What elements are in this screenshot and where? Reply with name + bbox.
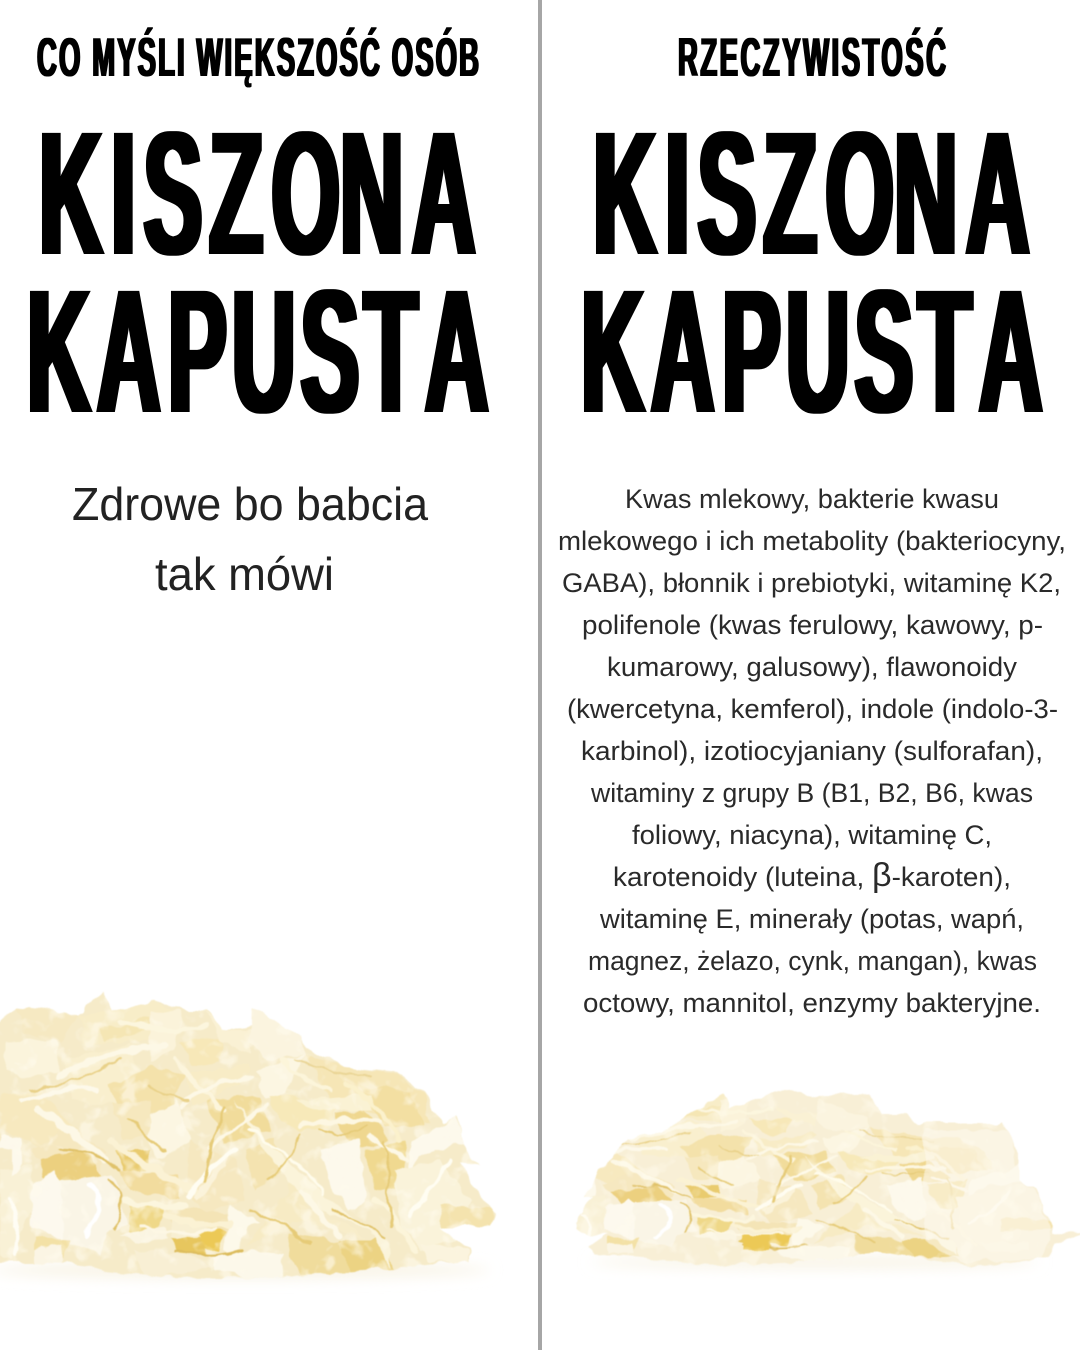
text: list of actual compounds: kumarowy, galusowy), flawonoidy	[607, 652, 1018, 682]
divider between columns	[538, 0, 542, 1350]
text: popular belief statement: Zdrowe bo babcia	[72, 478, 428, 530]
text: popular belief statement: tak mówi	[155, 548, 334, 600]
text: list of actual compounds: GABA), błonnik i prebiotyki, witaminę K2,	[562, 568, 1061, 598]
panel: popular belief	[0, 25, 500, 1280]
text: list of actual compounds: (kwercetyna, kemferol), indole (indolo-3-	[567, 694, 1058, 724]
title: kiszona: KISZONA	[593, 96, 1030, 292]
title: kapusta: KAPUSTA	[581, 254, 1043, 450]
text: list of actual compounds: witaminę E, minerały (potas, wapń,	[599, 904, 1024, 934]
title: kiszona: KISZONA	[39, 96, 476, 292]
text: list of actual compounds: polifenole (kwas ferulowy, kawowy, p-	[582, 610, 1043, 640]
text: popular belief statement	[72, 478, 428, 600]
panel: reality	[558, 25, 1080, 1270]
text: list of actual compounds: mlekowego i ich metabolity (bakteriocyny,	[558, 526, 1066, 556]
text: list of actual compounds: foliowy, niacyna), witaminę C,	[632, 820, 992, 850]
text: list of actual compounds: karbinol), izotiocyjaniany (sulforafan),	[581, 736, 1043, 766]
text: list of actual compounds: Kwas mlekowy, bakterie kwasu	[625, 484, 999, 514]
text: list of actual compounds: witaminy z grupy B (B1, B2, B6, kwas	[590, 778, 1033, 808]
text: list of actual compounds	[558, 484, 1066, 1018]
image: smaller sauerkraut pile	[570, 1090, 1080, 1270]
text: list of actual compounds: karotenoidy (luteina, β-karoten),	[613, 856, 1011, 893]
text: list of actual compounds: magnez, żelazo, cynk, mangan), kwas	[588, 946, 1037, 976]
title: kapusta: KAPUSTA	[27, 254, 489, 450]
heading: what most people think: CO MYŚLI WIĘKSZOŚĆ OSÓB	[37, 25, 479, 89]
text: list of actual compounds: octowy, mannitol, enzymy bakteryjne.	[583, 988, 1041, 1018]
heading: reality: RZECZYWISTOŚĆ	[678, 25, 946, 89]
image: large sauerkraut pile	[0, 985, 500, 1280]
